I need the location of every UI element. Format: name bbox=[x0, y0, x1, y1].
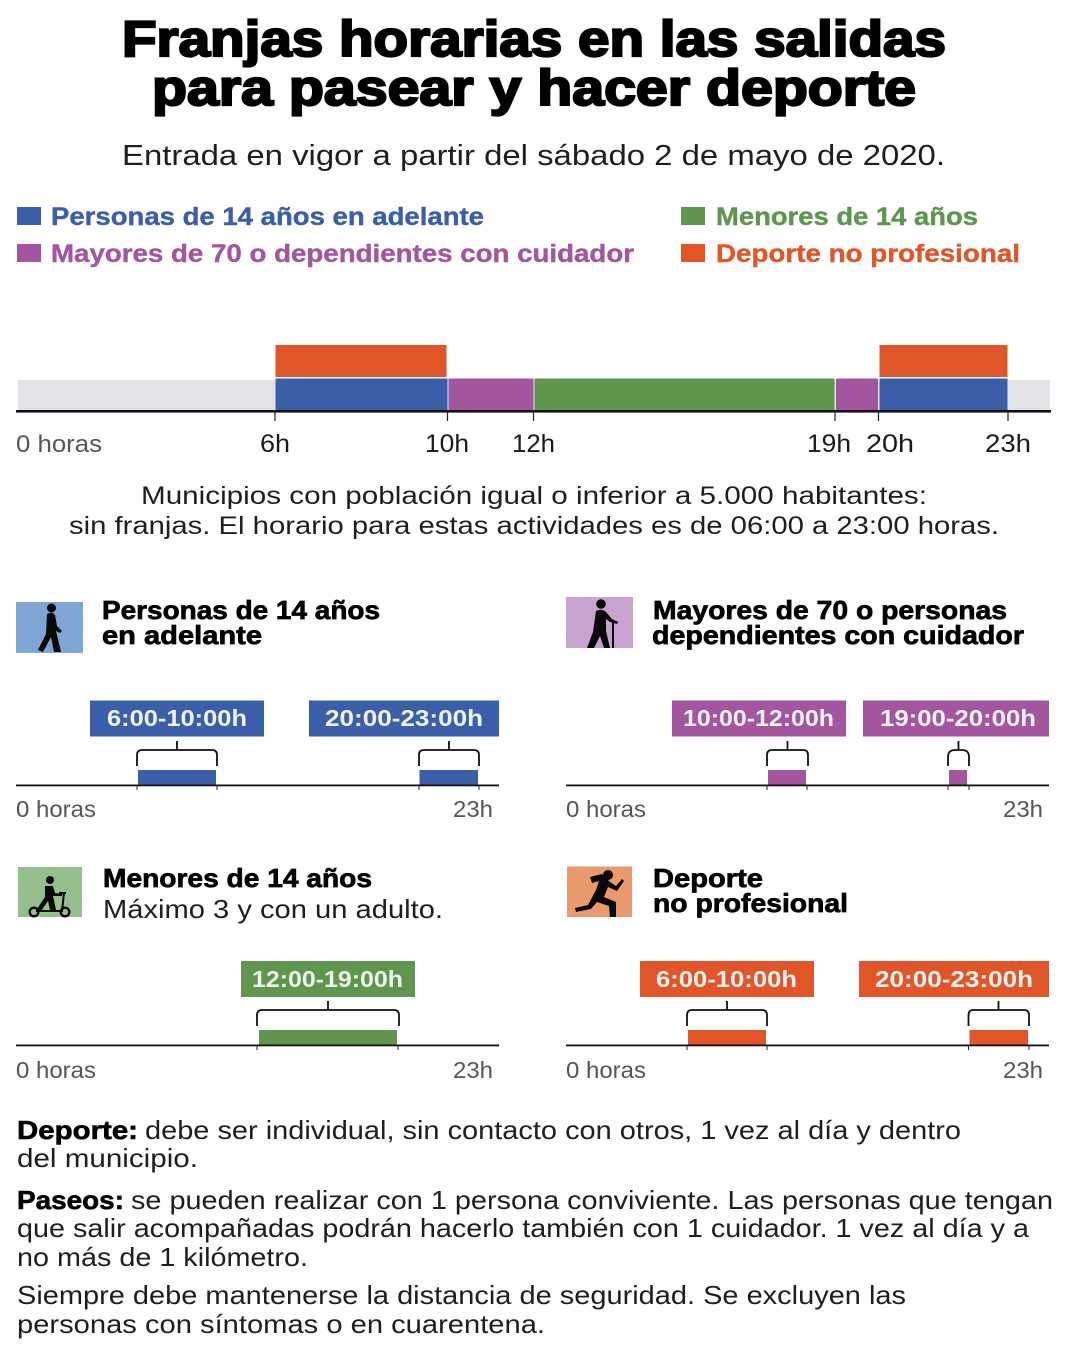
mini timeline bbox=[566, 741, 1049, 822]
main timeline chart: 19h bbox=[807, 430, 851, 458]
panel heading: en adelante bbox=[102, 620, 262, 650]
panel heading: Mayores de 70 o personas bbox=[653, 595, 1007, 625]
legend bbox=[17, 203, 1020, 268]
main timeline chart bbox=[16, 345, 1051, 458]
mini timeline: 23h bbox=[453, 796, 493, 822]
icon: child on scooter bbox=[18, 867, 82, 917]
icon: walking person bbox=[16, 602, 83, 653]
panel heading: Menores de 14 años bbox=[103, 863, 372, 893]
text block: paseos bbox=[17, 1185, 1053, 1272]
text block: deporte bbox=[17, 1115, 961, 1173]
note on municipalities: sin franjas. El horario para estas actividades es de 06:00 a 23:00 horas. bbox=[69, 512, 999, 540]
main timeline chart: 23h bbox=[985, 430, 1031, 458]
legend: deporte no profesional: Deporte no profesional bbox=[716, 240, 1020, 268]
panel heading bbox=[102, 595, 380, 650]
time label 19:00-20:00h: 19:00-20:00h bbox=[880, 705, 1036, 731]
text block: distancia de seguridad bbox=[17, 1280, 906, 1339]
time label 6:00-10:00h: 6:00-10:00h bbox=[656, 966, 797, 992]
mini timeline bbox=[16, 1001, 499, 1083]
main timeline chart: 6h bbox=[260, 430, 290, 458]
mini timeline: 0 horas bbox=[566, 796, 646, 822]
text block: deporte: Deporte: bbox=[17, 1115, 138, 1145]
text block: paseos: que salir acompañadas podrán hacerlo también con 1 cuidador. 1 vez al día y a bbox=[17, 1213, 1030, 1243]
text block: distancia de seguridad: personas con síntomas o en cuarentena. bbox=[17, 1309, 545, 1339]
time label 19:00-20:00h bbox=[863, 700, 1049, 736]
panel heading: Personas de 14 años bbox=[102, 595, 380, 625]
main timeline chart: 12h bbox=[512, 430, 555, 458]
main timeline chart: 10h bbox=[425, 430, 469, 458]
mini timeline: 23h bbox=[453, 1057, 493, 1083]
time label 20:00-23:00h bbox=[309, 700, 499, 736]
legend: mayores de 70: Mayores de 70 o dependientes con cuidador bbox=[51, 240, 634, 268]
panel heading: no profesional bbox=[653, 888, 848, 918]
time label 6:00-10:00h: 6:00-10:00h bbox=[107, 705, 247, 731]
panel: menores de 14 años bbox=[16, 863, 499, 1083]
time label 10:00-12:00h: 10:00-12:00h bbox=[683, 705, 834, 731]
panel: mayores de 70 o personas dependientes bbox=[566, 595, 1049, 822]
icon: elder with cane bbox=[566, 597, 633, 648]
panel heading bbox=[103, 863, 443, 924]
panel: personas de 14 años en adelante bbox=[16, 595, 499, 822]
panel heading: Deporte bbox=[653, 863, 763, 893]
text block: deporte: debe ser individual, sin contacto con otros, 1 vez al día y dentro bbox=[145, 1115, 961, 1145]
time label 20:00-23:00h: 20:00-23:00h bbox=[325, 705, 483, 731]
main timeline chart: 20h bbox=[866, 430, 914, 458]
text block: paseos: se pueden realizar con 1 persona conviviente. Las personas que tengan bbox=[131, 1185, 1053, 1215]
time label 12:00-19:00h bbox=[241, 961, 415, 997]
mini timeline: 23h bbox=[1003, 1057, 1043, 1083]
main timeline chart: 0 horas bbox=[16, 431, 102, 458]
title bbox=[122, 11, 946, 116]
note on municipalities: Municipios con población igual o inferior a 5.000 habitantes: bbox=[141, 482, 927, 510]
title: para pasear y hacer deporte bbox=[152, 60, 916, 116]
panel: deporte no profesional bbox=[566, 863, 1049, 1083]
text block: paseos: no más de 1 kilómetro. bbox=[17, 1242, 308, 1272]
mini timeline: 0 horas bbox=[16, 1057, 96, 1083]
mini timeline: 23h bbox=[1003, 796, 1043, 822]
icon: runner bbox=[567, 866, 632, 917]
time label 6:00-10:00h bbox=[90, 700, 264, 736]
panel heading: Máximo 3 y con un adulto. bbox=[103, 894, 443, 924]
mini timeline: 0 horas bbox=[566, 1057, 646, 1083]
note on municipalities bbox=[69, 482, 999, 540]
legend: menores de 14 años: Menores de 14 años bbox=[716, 203, 978, 231]
title: Franjas horarias en las salidas bbox=[122, 11, 946, 67]
time label 20:00-23:00h bbox=[859, 961, 1049, 997]
panel heading: dependientes con cuidador bbox=[652, 620, 1024, 650]
time label 12:00-19:00h: 12:00-19:00h bbox=[252, 966, 403, 992]
panel heading bbox=[653, 863, 848, 918]
panel heading bbox=[652, 595, 1024, 650]
mini timeline bbox=[566, 1001, 1049, 1083]
legend: personas de 14 años en adelante: Personas de 14 años en adelante bbox=[51, 203, 484, 231]
text block: distancia de seguridad: Siempre debe mantenerse la distancia de seguridad. Se excluyen las bbox=[17, 1280, 906, 1310]
subtitle: Entrada en vigor a partir del sábado 2 de mayo de 2020. bbox=[122, 140, 945, 172]
text block: deporte: del municipio. bbox=[17, 1143, 198, 1173]
mini timeline: 0 horas bbox=[16, 796, 96, 822]
mini timeline bbox=[16, 741, 499, 822]
time label 20:00-23:00h: 20:00-23:00h bbox=[875, 966, 1033, 992]
text block: paseos: Paseos: bbox=[17, 1185, 124, 1215]
time label 10:00-12:00h bbox=[672, 700, 846, 736]
time label 6:00-10:00h bbox=[640, 961, 814, 997]
